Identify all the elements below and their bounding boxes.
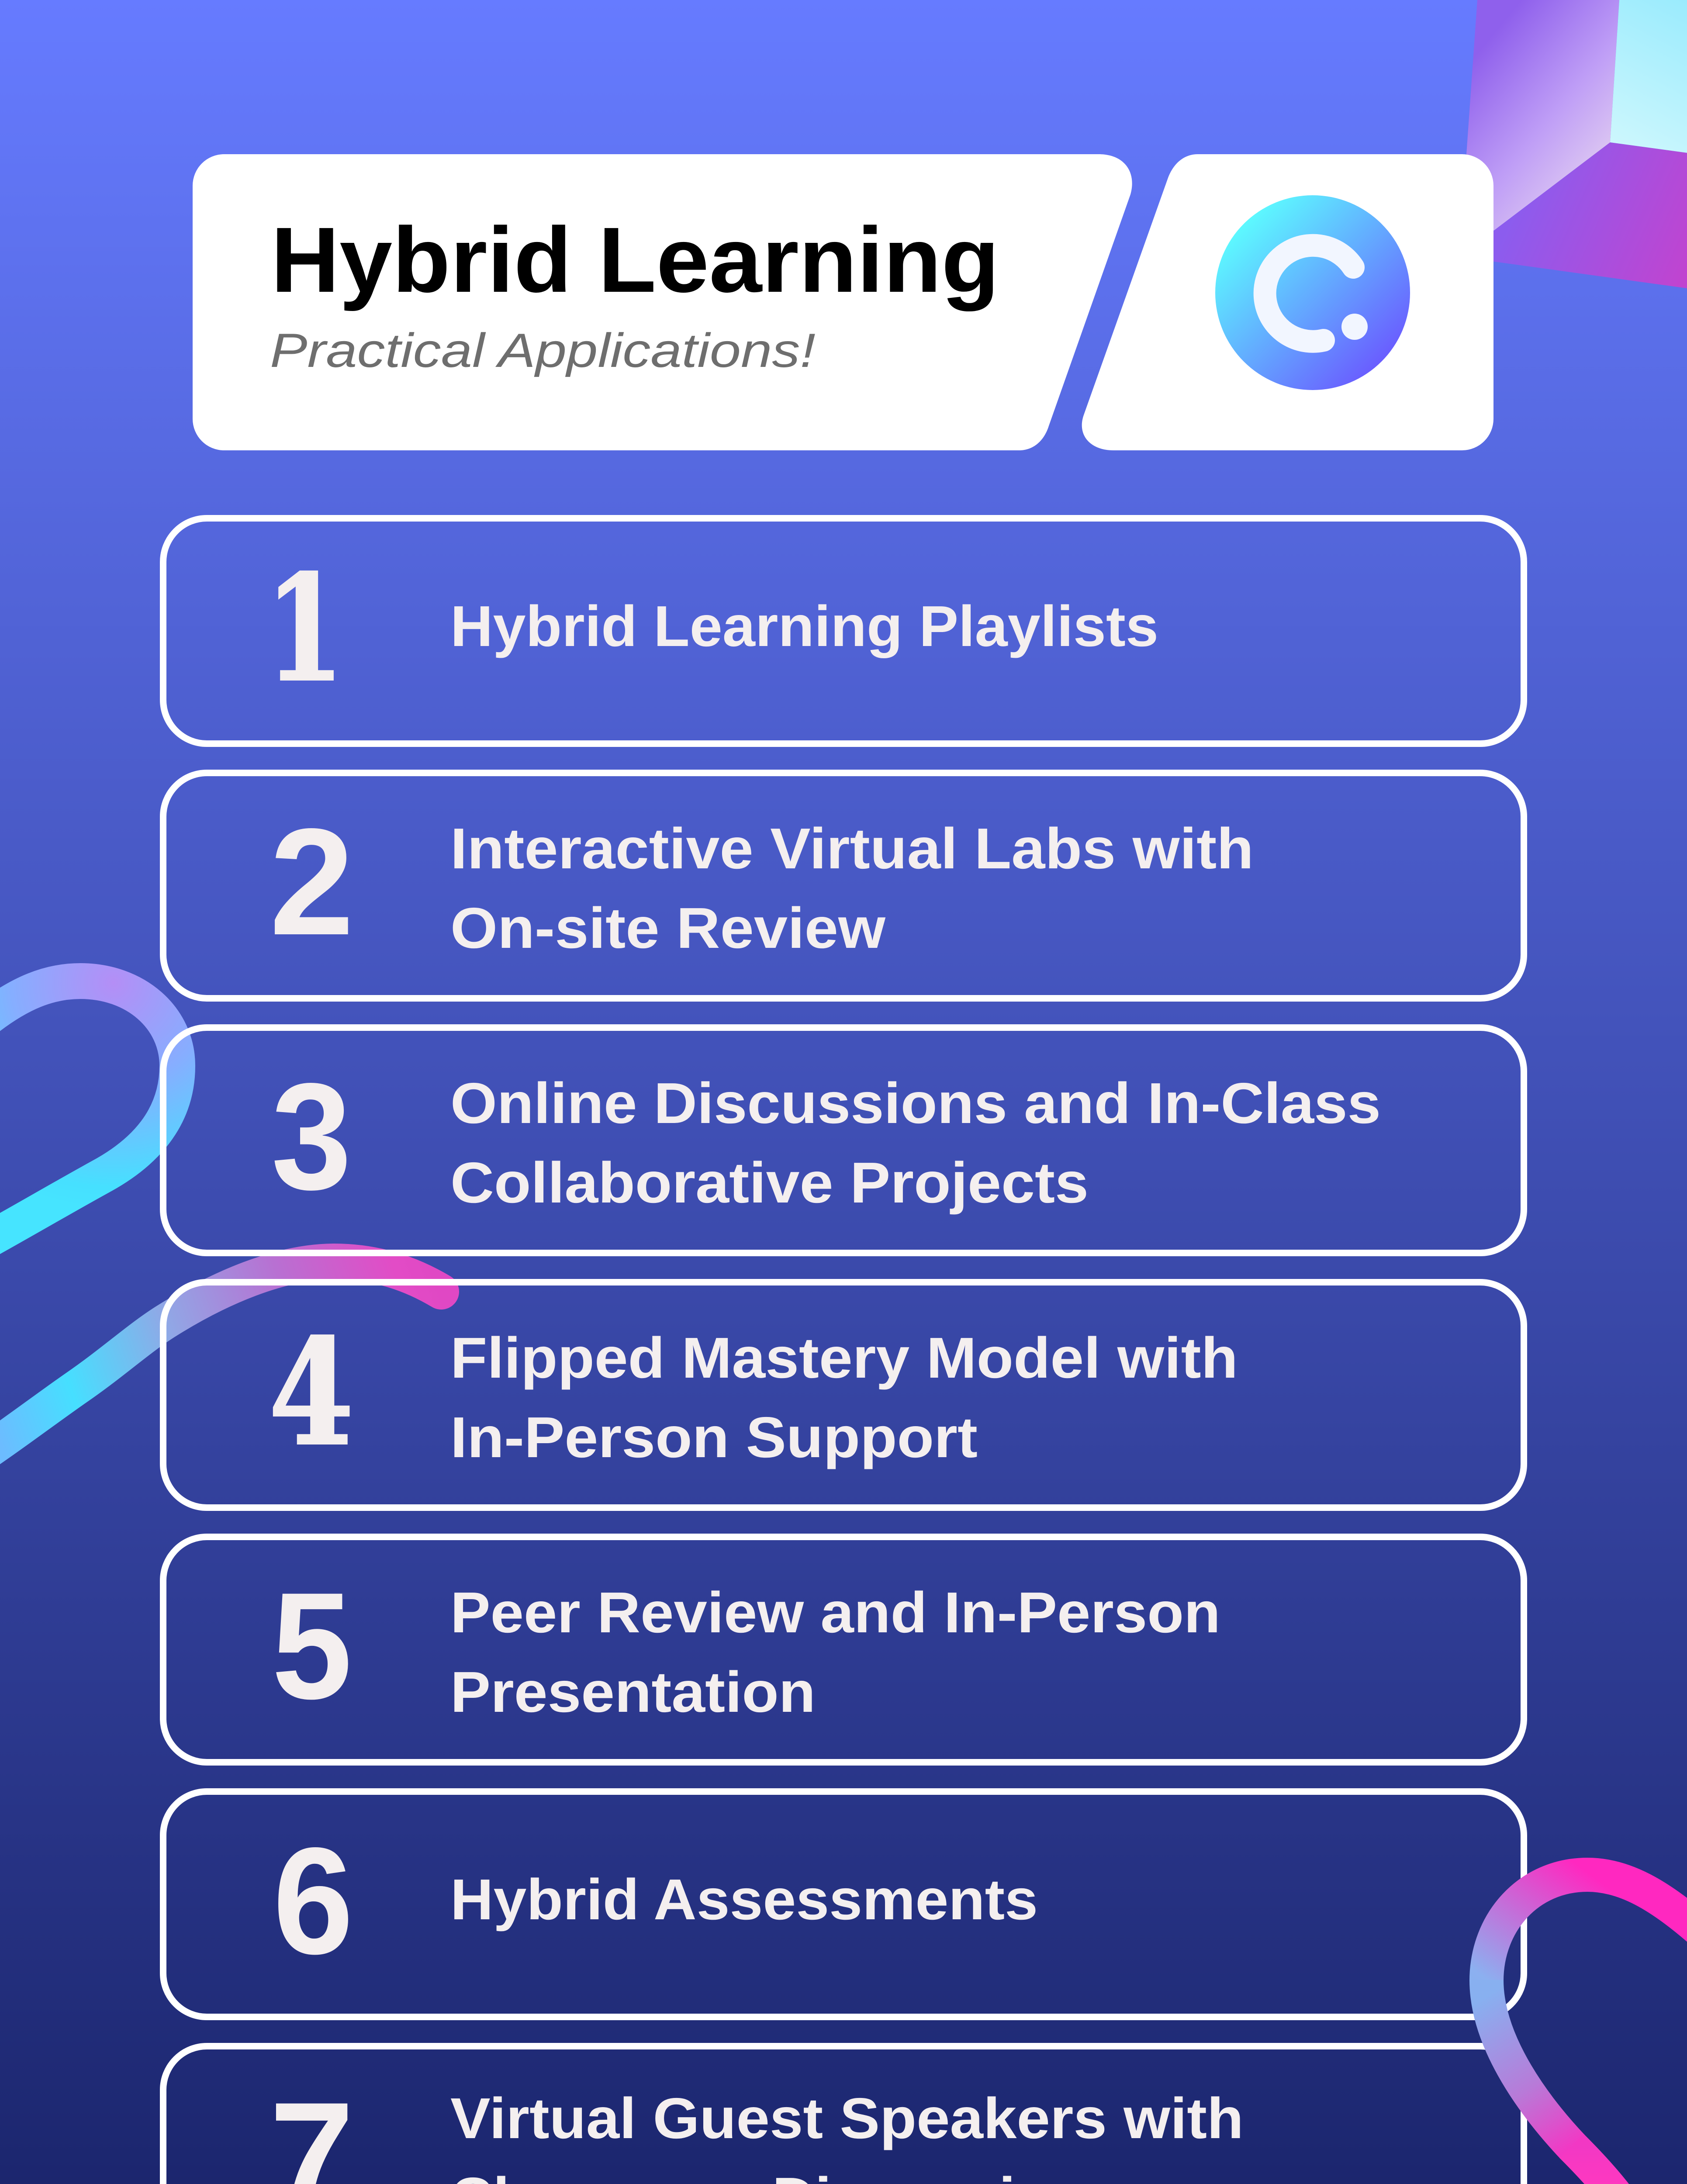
decorative ribbon: left loop: [0, 981, 177, 1240]
text: item 7: Virtual Guest Speakers with: [450, 2086, 1244, 2150]
text: item 1: Hybrid Learning Playlists: [450, 594, 1158, 658]
decorative ribbon: left wave: [0, 1261, 441, 1451]
text: item 2: Interactive Virtual Labs with: [450, 816, 1254, 881]
item 4: [163, 1282, 1524, 1508]
text: item 5: Peer Review and In-Person: [450, 1580, 1220, 1645]
logo card background: [1082, 154, 1493, 450]
item 5: [163, 1537, 1524, 1762]
text: item 3: Online Discussions and In-Class: [450, 1071, 1381, 1135]
header: title card: [193, 154, 1132, 450]
number 4: 4: [269, 1306, 354, 1478]
icon: brand logo: [1215, 195, 1410, 390]
item 6: [163, 1792, 1524, 2017]
number 1: 1: [265, 543, 344, 714]
item 7: [163, 2046, 1524, 2184]
item 3: [163, 1027, 1524, 1253]
text: item 4: Flipped Mastery Model with: [450, 1326, 1238, 1390]
text: item 3: Collaborative Projects: [450, 1151, 1089, 1215]
number 3: 3: [271, 1051, 352, 1221]
item 2: [163, 773, 1524, 999]
text: item 4: In-Person Support: [450, 1405, 978, 1469]
title card background: [193, 154, 1132, 450]
subtitle: Practical Applications!: [270, 324, 816, 377]
text: item 6: Hybrid Assessments: [450, 1867, 1038, 1932]
decorative 3D shape: top right: [1463, 0, 1687, 288]
number 2: 2: [270, 797, 354, 967]
number 6: 6: [273, 1816, 353, 1986]
header: logo card: [1082, 154, 1493, 450]
decorative ribbon: bottom right S curve: [1182, 1875, 1687, 2184]
number 5: 5: [272, 1561, 352, 1731]
title: Hybrid Learning: [271, 208, 999, 311]
text: item 5: Presentation: [450, 1660, 816, 1724]
item 1: [163, 518, 1524, 743]
text: item 2: On-site Review: [450, 896, 885, 960]
